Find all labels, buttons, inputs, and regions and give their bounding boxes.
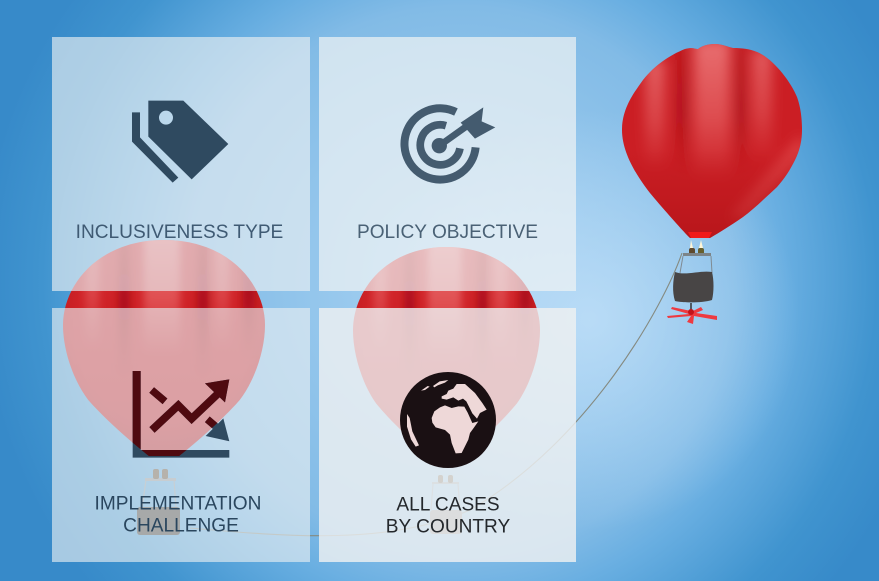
panel: policy objective — [319, 37, 576, 291]
basket — [673, 272, 714, 302]
balloon envelope — [620, 40, 808, 240]
burners and frame — [680, 240, 712, 273]
panel: all cases by country — [319, 308, 576, 562]
main red hot-air balloon — [620, 40, 808, 324]
heading: policy objective: POLICY OBJECTIVE — [357, 222, 538, 243]
heading: all cases by country: BY COUNTRY — [386, 516, 511, 538]
tether rope — [190, 253, 682, 536]
heading: all cases by country: ALL CASES — [396, 494, 500, 516]
propeller — [667, 303, 717, 324]
left balloon gear — [137, 469, 180, 535]
panel: inclusiveness type — [52, 37, 310, 291]
faded balloon behind right panels — [348, 237, 545, 534]
heading: inclusiveness type: INCLUSIVENESS TYPE — [76, 222, 283, 243]
heading: implementation challenge: IMPLEMENTATION — [95, 494, 261, 514]
heading: implementation challenge: CHALLENGE — [123, 516, 239, 536]
icon: globe — [400, 372, 496, 468]
icon: price tags — [132, 101, 228, 183]
icon: target with arrow — [404, 107, 495, 180]
faded balloon behind left panels — [58, 230, 270, 535]
icon: trend chart arrows — [133, 371, 229, 458]
right balloon gear — [430, 475, 462, 534]
panel: implementation challenge — [52, 308, 310, 562]
